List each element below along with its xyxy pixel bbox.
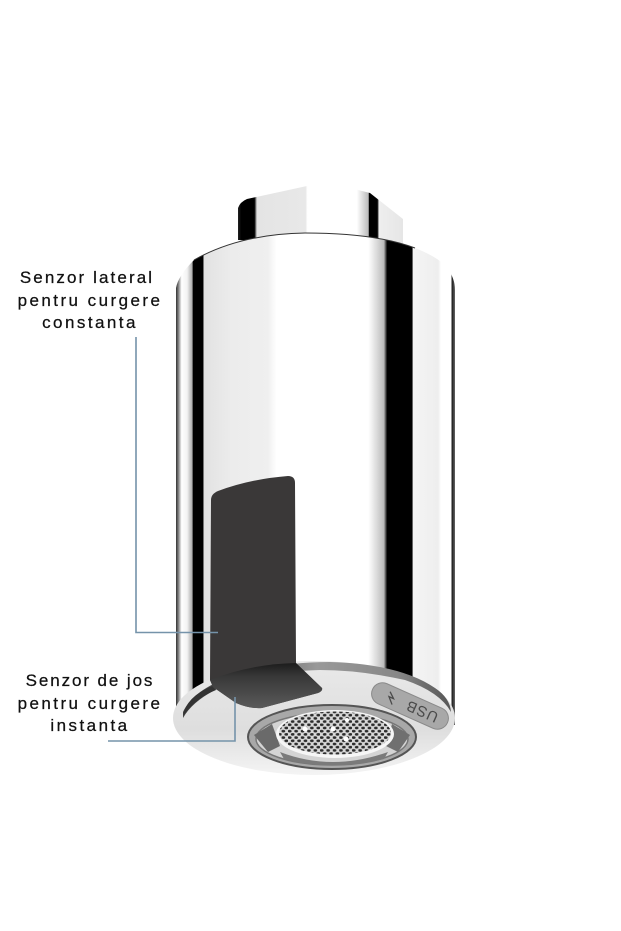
label: side sensor bbox=[18, 268, 162, 332]
aerator grille bbox=[248, 705, 416, 769]
callout line: bottom sensor bbox=[108, 697, 235, 741]
callout line: side sensor bbox=[136, 337, 218, 632]
label: side sensor: Senzor lateral bbox=[20, 268, 154, 287]
label: bottom sensor: Senzor de jos bbox=[26, 671, 154, 690]
label: bottom sensor bbox=[18, 671, 162, 735]
USB port plate: USB bbox=[403, 696, 441, 725]
cylindrical chrome body bbox=[176, 233, 455, 725]
label: side sensor: constanta bbox=[42, 313, 138, 332]
top hex nut bbox=[238, 185, 403, 246]
label: side sensor: pentru curgere bbox=[18, 290, 162, 310]
side sensor window bbox=[210, 476, 322, 708]
label: bottom sensor: instanta bbox=[50, 716, 130, 735]
USB port plate bbox=[368, 679, 452, 733]
bottom face disc bbox=[173, 661, 455, 775]
label: bottom sensor: pentru curgere bbox=[18, 694, 162, 712]
